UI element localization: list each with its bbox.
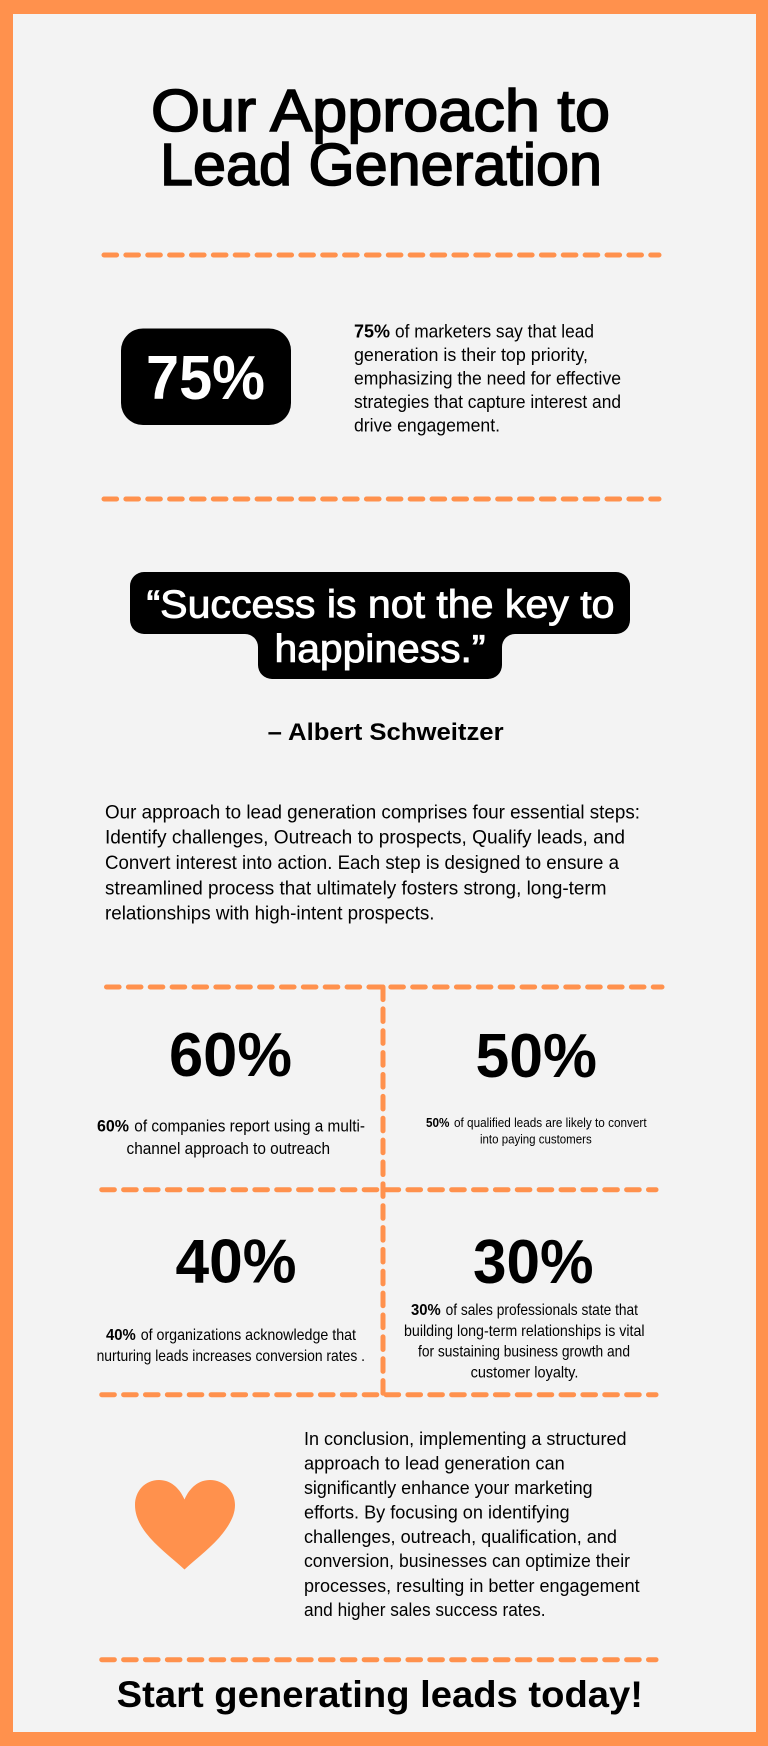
text: 60% description: of companies report using a multi- <box>134 1118 365 1136</box>
number: 30%: 30% <box>473 1228 594 1297</box>
conclusion paragraph <box>304 1428 640 1620</box>
conclusion paragraph: efforts. By focusing on identifying <box>304 1502 570 1523</box>
panel: 60% statistic <box>97 1021 365 1158</box>
panel: 75% statistic <box>121 322 621 436</box>
text: 40% description: of organizations acknowledge that <box>141 1327 356 1344</box>
conclusion paragraph: significantly enhance your marketing <box>304 1477 593 1498</box>
text: 50% description: of qualified leads are likely to convert <box>454 1116 647 1130</box>
text: 75% description: strategies that capture interest and <box>354 392 621 412</box>
text: 30% description: of sales professionals state that <box>446 1302 638 1319</box>
panel: 40% statistic <box>97 1228 365 1365</box>
text: 40% description <box>97 1327 365 1365</box>
text: 50% description: 50% <box>426 1116 450 1130</box>
conclusion paragraph: approach to lead generation can <box>304 1453 565 1474</box>
conclusion paragraph: challenges, outreach, qualification, and <box>304 1526 617 1547</box>
intro paragraph: Our approach to lead generation comprises four essential steps: <box>105 802 640 823</box>
title <box>151 78 610 198</box>
title: Lead Generation <box>160 132 602 198</box>
panel: 50% statistic <box>426 1022 647 1147</box>
text: 50% description: into paying customers <box>480 1133 592 1147</box>
quote block: “Success is not the key to <box>146 583 614 626</box>
number: 60%: 60% <box>169 1021 292 1090</box>
text: 75% description: drive engagement. <box>354 416 500 436</box>
text: 60% description: 60% <box>97 1118 129 1136</box>
text: 30% description: building long-term relationships is vital <box>404 1323 645 1340</box>
intro paragraph: streamlined process that ultimately fosters strong, long-term <box>105 878 606 899</box>
text: 40% description: 40% <box>106 1327 136 1344</box>
intro paragraph: Convert interest into action. Each step is designed to ensure a <box>105 853 619 874</box>
conclusion paragraph: conversion, businesses can optimize their <box>304 1550 630 1571</box>
text: 60% description: channel approach to outreach <box>126 1140 330 1158</box>
text: 60% description <box>97 1118 365 1158</box>
intro paragraph: relationships with high-intent prospects. <box>105 904 434 925</box>
quote block <box>130 572 630 679</box>
conclusion paragraph: In conclusion, implementing a structured <box>304 1428 626 1449</box>
text: 75% description <box>354 322 621 436</box>
badge: 75%: 75% <box>146 344 265 413</box>
icon: heart <box>135 1480 235 1570</box>
intro paragraph <box>105 802 640 925</box>
panel: 30% statistic <box>404 1228 645 1382</box>
text: 30% description <box>404 1302 645 1382</box>
text: 40% description: nurturing leads increases conversion rates . <box>97 1348 365 1365</box>
title: Our Approach to <box>151 78 610 144</box>
text: 75% description: emphasizing the need for effective <box>354 368 621 388</box>
call to action: Start generating leads today! <box>117 1674 643 1715</box>
text: 30% description: for sustaining business growth and <box>418 1344 630 1361</box>
number: 50%: 50% <box>476 1022 597 1091</box>
badge: 75% <box>121 328 291 425</box>
text: 75% description: generation is their top priority, <box>354 345 588 365</box>
conclusion paragraph: processes, resulting in better engagement <box>304 1575 640 1596</box>
conclusion paragraph: and higher sales success rates. <box>304 1599 546 1620</box>
quote attribution: – Albert Schweitzer <box>268 719 504 746</box>
number: 40%: 40% <box>176 1228 296 1297</box>
text: 75% description: of marketers say that lead <box>395 322 594 342</box>
text: 50% description <box>426 1116 647 1147</box>
intro paragraph: Identify challenges, Outreach to prospects, Qualify leads, and <box>105 828 625 849</box>
quote block: happiness.” <box>274 628 486 671</box>
text: 75% description: 75% <box>354 322 390 342</box>
text: 30% description: 30% <box>411 1302 441 1319</box>
text: 30% description: customer loyalty. <box>471 1365 578 1382</box>
